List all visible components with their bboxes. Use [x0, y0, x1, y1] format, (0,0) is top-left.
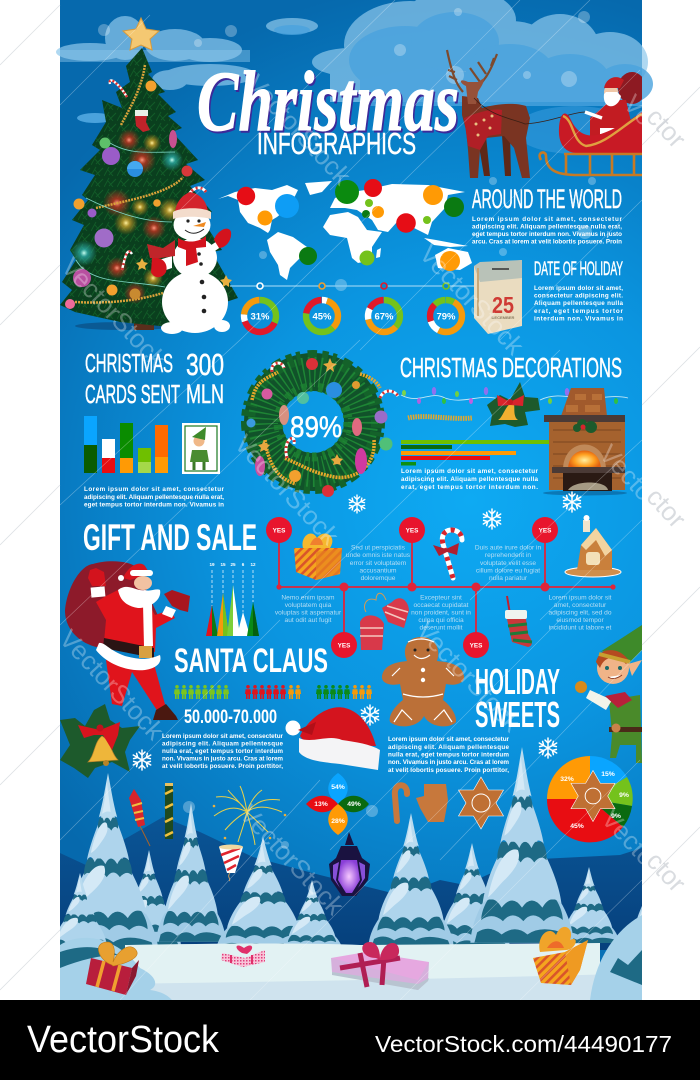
christmas cards heading [85, 347, 224, 409]
sweets text: Lorem ipsum dolor sit amet, consectetur [388, 736, 510, 743]
santa claus heading: SANTA CLAUS [174, 642, 328, 680]
cone values: 6 [242, 562, 245, 567]
watermark labels: VectorStock [234, 799, 351, 921]
donut 45% [306, 300, 338, 332]
yes pin 4 [331, 632, 357, 658]
belt [103, 638, 154, 658]
timeline caption 3 [275, 594, 342, 624]
pie labels: 32% [560, 776, 574, 783]
fir tree 5 [284, 880, 341, 944]
cone values: 19 [209, 562, 215, 567]
timeline caption 1: Sed ut perspiciatis [351, 544, 406, 552]
date of holiday text: consectetur adipiscing elit. [534, 293, 623, 300]
subtitle: infographics: INFOGRAPHICS [257, 126, 416, 161]
fir tree 11 [60, 873, 106, 945]
snow ground [60, 915, 642, 1000]
yes pin 1: YES [273, 528, 286, 534]
fireworks burst [213, 786, 286, 845]
decorations text: Lorem ipsum dolor sit amet, consectetur [401, 468, 539, 475]
date of holiday text: Aliquam pellentesque nulla [534, 300, 623, 307]
donut 79%: 79% [436, 312, 456, 322]
christmas cards heading: MLN [186, 379, 224, 409]
leaf diagram: 54% [331, 784, 345, 791]
timeline caption 1 [346, 544, 411, 582]
mittens [360, 593, 409, 650]
fir tree 6 [368, 813, 454, 946]
beard [118, 587, 160, 608]
tear-off calendar: 25 [492, 292, 514, 318]
fir tree 4 [218, 837, 297, 944]
date of holiday text: erat, eget tempus tortor [534, 308, 624, 315]
watermark labels on white margin: ctor [641, 846, 692, 898]
snow bokeh dots [98, 8, 596, 918]
christmas cards heading: CHRISTMAS [85, 348, 173, 378]
fir tree 7 [444, 843, 510, 944]
horizontal bars [401, 440, 549, 466]
cone values: 15 [220, 562, 226, 567]
santa text [162, 733, 284, 770]
holiday sweets heading [475, 661, 560, 735]
timeline caption 2: reprehenderit in [485, 552, 531, 559]
yes timeline [266, 517, 616, 658]
donut 67%: 67% [374, 312, 394, 322]
coat [96, 590, 175, 652]
people icon rows [174, 685, 372, 699]
pie labels: 9% [611, 813, 621, 820]
timeline caption 2: Duis aute irure dolor in [475, 544, 541, 552]
face [134, 576, 152, 590]
yes pin 3: YES [539, 528, 552, 534]
people group 2 [245, 685, 301, 699]
date of holiday text: Lorem ipsum dolor sit amet, [534, 285, 623, 292]
timeline line with dots [230, 283, 478, 289]
holly with golden bell [60, 704, 140, 778]
donut 45%: 45% [312, 312, 332, 322]
gingerbread cookies [395, 777, 504, 829]
fir tree 3 [156, 803, 226, 942]
pie labels [560, 771, 629, 830]
purple lantern [329, 832, 370, 896]
timeline caption 2 [475, 544, 541, 582]
cards text [84, 486, 225, 508]
rocket firework [129, 789, 150, 846]
watermark labels on white margin [641, 102, 692, 898]
snowy fir forest [60, 747, 642, 950]
firework tube [165, 783, 173, 839]
timeline caption 4: non proident, sunt in [411, 610, 471, 616]
watermark labels: VectorStock [241, 69, 358, 191]
footer bar [0, 1000, 700, 1080]
pie chart [547, 756, 633, 842]
timeline caption 3: aut odit aut fugit [285, 617, 332, 624]
holiday sweets heading: HOLIDAY [475, 661, 560, 702]
gingerbread man [382, 637, 464, 726]
fir tree 2 [138, 850, 181, 944]
timeline caption 5: Lorem ipsum dolor sit [548, 594, 612, 602]
cookie cane [395, 785, 407, 821]
star cookie [571, 771, 615, 821]
santa with sack [65, 561, 190, 720]
watermark labels: VectorStock [56, 252, 173, 374]
coat front strip [143, 604, 153, 646]
watermark labels: Vector [596, 804, 668, 878]
santa text: adipiscing elit. Aliquam pellentesque [162, 740, 283, 748]
cookie mitten [416, 784, 448, 822]
pie labels: 15% [601, 771, 615, 778]
watermark labels: VectorStock [229, 429, 346, 551]
arm and mitten [91, 586, 105, 598]
yes pin 3 [532, 517, 558, 543]
right hand and bag neck [162, 606, 176, 618]
timeline caption 4: Excepteur sint [420, 594, 462, 602]
yes pin 5 [463, 632, 489, 658]
pie labels: 45% [570, 823, 584, 830]
donut 67% [368, 300, 400, 332]
timeline caption 5: incididunt ut labore et [549, 624, 612, 632]
sweets text: adipiscing elit. Aliquam pellentesque [388, 744, 509, 751]
gift and sale heading: GIFT AND SALE [83, 517, 257, 558]
watermark labels: Vector [594, 439, 666, 513]
89%: 89% [290, 411, 342, 444]
watermark labels on white margin: ctor [641, 102, 692, 154]
cards text: eget tempus tortor interdum non. Vivamus in [84, 502, 224, 508]
santa in sleigh [540, 72, 646, 175]
wreath baubles [246, 358, 392, 497]
reindeer [447, 50, 585, 178]
leaf diagram [306, 773, 369, 835]
timeline caption 4 [411, 594, 471, 632]
around the world text [472, 216, 623, 246]
timeline caption 4: culpa qui officia [418, 617, 464, 624]
timeline caption 5: eiusmod tempor [556, 617, 604, 624]
christmas cards heading: CARDS SENT [85, 379, 180, 409]
decorations text: adipiscing elit. Aliquam pellentesque nulla [401, 476, 538, 483]
red gift [86, 942, 139, 995]
timeline caption 2: voluptate velit esse [480, 560, 536, 567]
timeline caption 2: nulla pariatur [489, 575, 528, 582]
tree garlands [75, 65, 183, 303]
tree star [123, 18, 159, 50]
legs [106, 660, 166, 712]
timeline caption 5: adipiscing elit, sed do [548, 610, 612, 616]
watermark labels on white margin: ctor [641, 482, 692, 534]
timeline caption 1: doloremque [361, 575, 396, 582]
script title: Christmas: Christmas [198, 55, 460, 151]
around the world text: Lorem ipsum dolor sit amet, consectetur [472, 216, 623, 223]
timeline caption 3: Nemo enim ipsam [281, 594, 335, 602]
fir tree 10 [637, 906, 642, 918]
fir tree 8 [470, 747, 574, 943]
candy cane with bow [433, 530, 462, 578]
big pink gift [331, 942, 429, 990]
date of holiday text [534, 285, 624, 322]
footer logo text: VectorStock [27, 1019, 220, 1061]
snowman [136, 188, 232, 334]
tear-off calendar: DECEMBER [492, 315, 515, 320]
people group 1 [174, 685, 229, 699]
cone values: 12 [250, 562, 256, 567]
santa hat [286, 707, 380, 770]
date of holiday heading: DATE OF HOLIDAY [534, 259, 623, 280]
tree baubles [65, 80, 192, 309]
fireplace [543, 388, 627, 496]
holiday sweets heading: SWEETS [475, 694, 560, 735]
timeline caption 2: cillum dolore eu fugiat [476, 568, 540, 574]
date of holiday text: interdum non. Vivamus in [534, 315, 623, 322]
script title: Christmas: Christmas [197, 53, 459, 149]
watermark labels: Ve [618, 89, 660, 131]
string lights [401, 387, 628, 404]
around the world text: eget tempus tortor interdum non. Vivamus in justo [472, 231, 622, 238]
watermark diagonals [60, 0, 642, 1000]
around the world text: adipiscing elit. Aliquam pellentesque nulla erat, [472, 224, 622, 230]
clouds [56, 0, 653, 154]
map data bubbles [237, 179, 464, 271]
timeline caption 3: voluptatem quia [285, 602, 332, 609]
yes pin 5: YES [470, 642, 483, 650]
stacked bar chart [84, 416, 168, 473]
christmas tree [60, 18, 238, 330]
leaf diagram: 13% [314, 801, 328, 808]
timeline caption 4: occaecat cupidatat [414, 602, 469, 609]
coat hem [96, 643, 160, 670]
tear-off calendar [474, 260, 522, 334]
people group 3 [316, 685, 372, 699]
sweets text: nulla erat, eget tempus tortor interdum [388, 752, 509, 758]
timeline caption 5: amet, consectetur [554, 602, 607, 609]
timeline caption 5 [548, 594, 612, 632]
timeline caption 3: voluptas sit aspernatur [275, 610, 342, 616]
donut 79% [430, 300, 462, 332]
decorations text: erat, eget tempus tortor interdum non. [401, 484, 538, 491]
pie labels: 9% [619, 792, 629, 799]
elf card [182, 423, 220, 474]
small pink gift [221, 945, 265, 967]
timeline caption 1: accusantium [359, 568, 397, 574]
elf [575, 625, 642, 763]
tree lights glow [71, 129, 183, 304]
yes pin 1 [266, 517, 292, 543]
footer url: VectorStock.com/44490177 [375, 1031, 672, 1057]
sweets text [388, 736, 510, 774]
background panel [60, 0, 642, 1000]
decorations text [401, 468, 539, 491]
watermark labels: VectorStock [54, 624, 171, 746]
cone values [209, 562, 256, 567]
santa number: 50.000-70.000 [184, 706, 277, 728]
fir tree 1 [74, 773, 158, 950]
santa text: nulla erat, eget tempus tortor interdum [162, 748, 283, 755]
santa text: Lorem ipsum dolor sit amet, consectetur [162, 733, 284, 740]
timeline caption 4: deserunt mollit [420, 624, 463, 632]
cards text: Lorem ipsum dolor sit amet, consectetur [84, 486, 225, 493]
boot [153, 704, 178, 720]
watermark labels: VectorStock [411, 616, 528, 738]
santa text: non. Vivamus in justo arcu. Cras at lorem [162, 756, 283, 762]
sweets text: at velit lobortis posuere. Proin porttitor, [388, 767, 509, 774]
gingerbread house [565, 515, 621, 577]
watermark labels [54, 69, 668, 921]
christmas cards heading: 300 [186, 347, 224, 382]
sack [65, 561, 160, 648]
donut 31% [244, 300, 276, 332]
continents [218, 181, 472, 280]
donut 31%: 31% [250, 312, 270, 322]
cards text: adipiscing elit. Aliquam pellentesque nulla erat, [84, 494, 224, 501]
leaf diagram: 28% [331, 818, 345, 825]
yes pin 2 [399, 517, 425, 543]
hat [123, 564, 150, 580]
christmas stocking [505, 596, 532, 647]
sweets text: non. Vivamus in justo arcu. Cras at lorem [388, 759, 509, 766]
leaf diagram: 49% [347, 801, 361, 808]
timeline caption 1: unde omnis iste natus [346, 552, 411, 559]
watermark labels: VectorStock [414, 239, 531, 361]
santa text: at velit lobortis posuere. Proin porttitor, [162, 763, 283, 770]
fir tree 9 [568, 867, 618, 943]
party popper [219, 844, 243, 881]
gift box [294, 533, 342, 580]
yes pin 4: YES [338, 642, 351, 650]
holly and bell [487, 382, 540, 427]
world map [218, 179, 472, 280]
yes pin 2: YES [406, 528, 419, 534]
snowflakes [133, 492, 581, 770]
around the world text: arcu. Cras at lorem at velit lobortis posuere. Proin [472, 238, 622, 246]
gold garland [408, 417, 472, 418]
christmas wreath [246, 357, 398, 497]
timeline caption 1: error sit voluptatem [350, 560, 407, 567]
cone chart [206, 562, 259, 636]
cookie star [458, 777, 504, 829]
orange gift [533, 927, 588, 985]
cone values: 25 [230, 562, 236, 567]
mountains [60, 817, 642, 950]
